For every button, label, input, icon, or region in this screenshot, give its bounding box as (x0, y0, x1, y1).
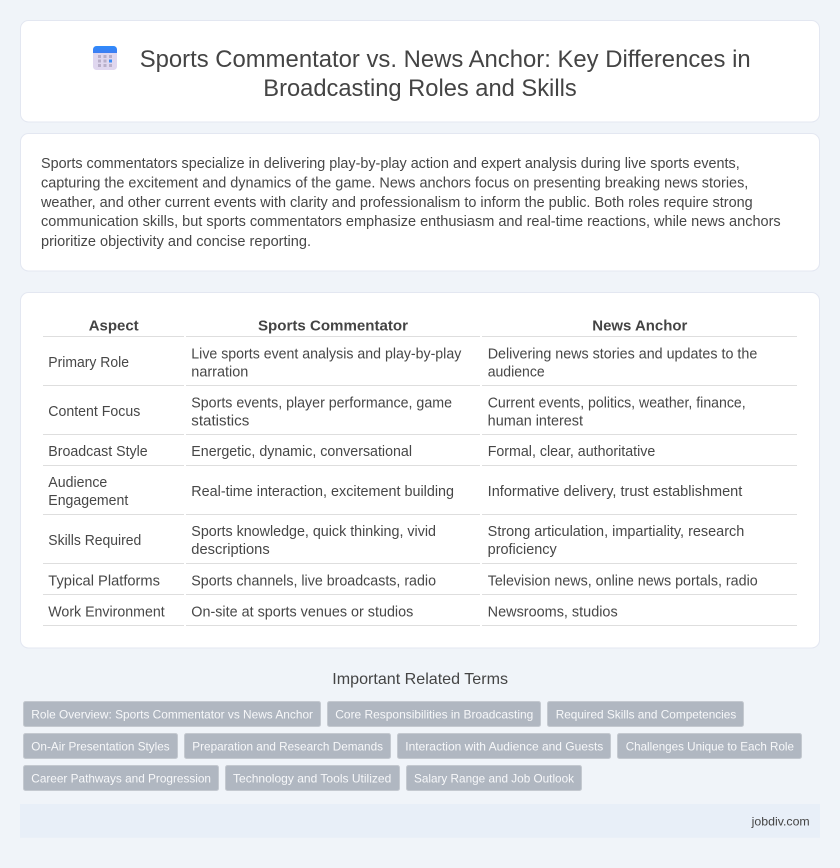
row: work environment (48, 604, 618, 620)
tag: Required Skills and Competencies (556, 707, 736, 721)
row: audience engagement (48, 475, 742, 509)
tag (184, 734, 390, 758)
text block: summary: prioritize objectivity and concise reporting. (41, 234, 311, 250)
tag (398, 734, 610, 758)
row: primary role: audience (488, 364, 545, 380)
tag: Role Overview: Sports Commentator vs News Anchor (31, 707, 313, 721)
row: typical platforms (48, 573, 758, 589)
row: primary role: Delivering news stories and updates to the (488, 346, 757, 362)
row: content focus: Content Focus (48, 404, 140, 420)
icon: calendar (93, 46, 117, 70)
table header: Sports Commentator (258, 318, 408, 335)
tag: Interaction with Audience and Guests (405, 739, 603, 753)
table header: News Anchor (592, 318, 687, 335)
row: content focus: human interest (488, 413, 583, 429)
tag (24, 766, 218, 790)
table header: Aspect (89, 318, 139, 335)
text block: summary: Sports commentators specialize in delivering play-by-play action and expert analysis during live sports events, (41, 156, 740, 172)
table header (89, 318, 687, 335)
row: content focus: Current events, politics, weather, finance, (488, 395, 746, 411)
row: skills required: proficiency (488, 542, 557, 558)
title (140, 46, 751, 102)
row: skills required: Sports knowledge, quick thinking, vivid (191, 524, 436, 540)
row: content focus: statistics (191, 413, 249, 429)
row: audience engagement: Real-time interaction, excitement building (191, 484, 454, 500)
text block: summary: capturing the excitement and dynamics of the game. News anchors focus on presenting breaking news stories, (41, 175, 748, 191)
footer (20, 804, 820, 838)
tag (24, 702, 320, 726)
row: primary role (48, 346, 757, 380)
tag (548, 702, 744, 726)
row: typical platforms: Television news, online news portals, radio (488, 573, 758, 589)
row: broadcast style: Energetic, dynamic, conversational (191, 444, 412, 460)
tag: Challenges Unique to Each Role (626, 739, 794, 753)
text block: summary: weather, and other current events with clarity and professionalism to inform the public. Both roles require strong (40, 195, 753, 211)
text block: summary: communication skills, but sports commentators emphasize enthusiasm and real-time reactions, while news anchors (41, 214, 781, 230)
row: work environment: On-site at sports venues or studios (191, 604, 413, 620)
row: skills required: descriptions (191, 542, 270, 558)
row: broadcast style: Formal, clear, authoritative (488, 444, 655, 460)
row: content focus (48, 395, 746, 429)
tag (618, 734, 802, 758)
row: primary role: Live sports event analysis and play-by-play (191, 346, 462, 362)
row: audience engagement: Engagement (48, 493, 128, 509)
row: audience engagement: Audience (48, 475, 107, 491)
title: Broadcasting Roles and Skills (263, 75, 577, 102)
related term tags (24, 702, 802, 790)
row: typical platforms: Typical Platforms (48, 573, 160, 589)
tag: Salary Range and Job Outlook (414, 771, 575, 785)
footer source: jobdiv.com (751, 814, 810, 828)
tag: On-Air Presentation Styles (31, 739, 170, 753)
row: work environment: Newsrooms, studios (488, 604, 618, 620)
row: skills required: Skills Required (48, 533, 141, 549)
heading: important related terms: Important Related Terms (332, 671, 508, 688)
row: primary role: narration (191, 364, 248, 380)
row: primary role: Primary Role (48, 355, 129, 371)
row: work environment: Work Environment (48, 604, 165, 620)
tag: Career Pathways and Progression (31, 771, 211, 785)
row: typical platforms: Sports channels, live broadcasts, radio (191, 573, 436, 589)
text block: summary (40, 156, 781, 250)
row: broadcast style: Broadcast Style (48, 444, 148, 460)
tag (24, 734, 178, 758)
panel: description (20, 134, 820, 271)
tag (406, 766, 582, 790)
tag: Core Responsibilities in Broadcasting (335, 707, 533, 721)
panel: header (20, 20, 820, 122)
tag: Preparation and Research Demands (192, 739, 383, 753)
row: skills required (48, 524, 744, 558)
panel: comparison table (20, 292, 820, 648)
tag (226, 766, 400, 790)
title: Sports Commentator vs. News Anchor: Key Differences in (140, 46, 751, 73)
row: audience engagement: Informative delivery, trust establishment (488, 484, 742, 500)
tag (328, 702, 540, 726)
row: content focus: Sports events, player performance, game (191, 395, 452, 411)
row: skills required: Strong articulation, impartiality, research (488, 524, 744, 540)
tag: Technology and Tools Utilized (233, 771, 391, 785)
row: broadcast style (48, 444, 655, 460)
